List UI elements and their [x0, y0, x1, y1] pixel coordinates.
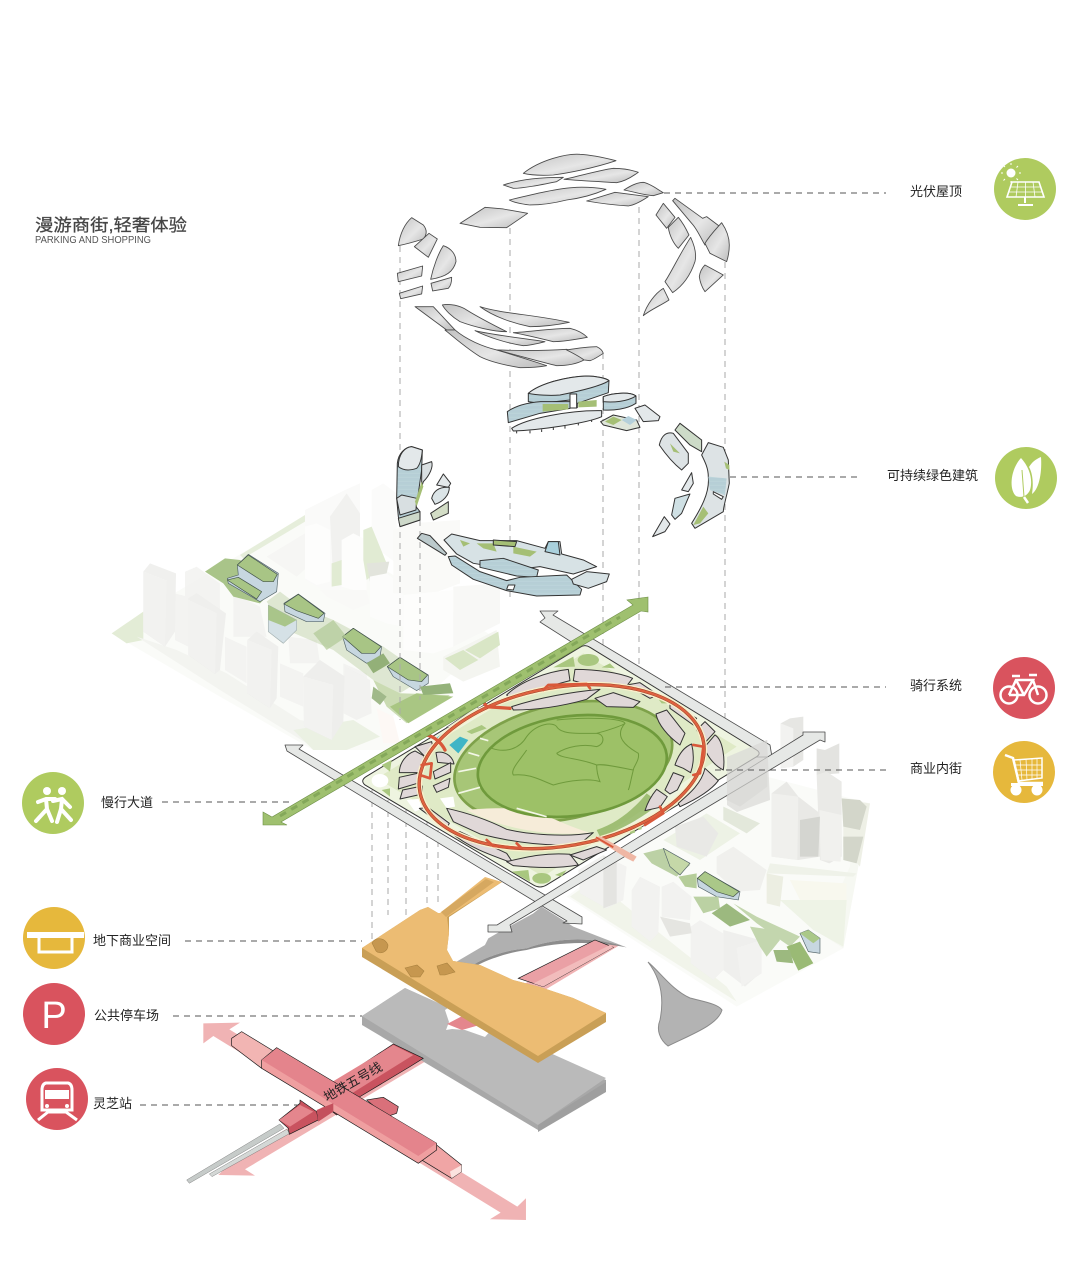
green terraces right — [643, 848, 820, 971]
front office towers — [143, 563, 400, 743]
front striped towers right — [578, 855, 762, 987]
south-west tube — [279, 1100, 318, 1134]
leader lines — [140, 193, 886, 1105]
bottom cluster — [415, 304, 603, 368]
label: parking: 公共停车场 — [94, 1008, 159, 1023]
back towers right — [675, 717, 867, 892]
pink metro tube back — [518, 940, 613, 987]
central park inner ellipse — [472, 705, 673, 827]
stub left — [232, 1032, 280, 1068]
park contours — [492, 718, 639, 790]
platform — [363, 646, 759, 887]
parking level — [362, 988, 606, 1132]
icon: leaves — [995, 447, 1057, 509]
white patches — [372, 774, 455, 812]
green terrace roofs — [205, 554, 453, 723]
road strips — [285, 611, 825, 932]
commercial blocks — [398, 669, 724, 867]
central park outer ellipse — [443, 683, 683, 841]
south-east road arrow — [488, 732, 825, 932]
skylight openings — [372, 939, 455, 977]
lawn patches — [382, 654, 670, 884]
title: PARKING AND SHOPPING — [35, 235, 151, 246]
green slow-walk avenue arrow — [263, 597, 648, 825]
icon: underground space — [23, 907, 85, 969]
park lower ribs — [597, 793, 660, 837]
void in parking level — [445, 1000, 500, 1037]
lower left podium — [417, 533, 609, 596]
metro stub through void — [447, 1012, 490, 1030]
icon: parking: P — [41, 995, 67, 1037]
title: 漫游商街,轻奢体验 — [35, 216, 187, 235]
strip by road — [447, 707, 482, 729]
stub right — [422, 1145, 462, 1178]
beige crescent — [467, 808, 590, 834]
grey lower blob — [648, 962, 722, 1046]
north-east tube — [313, 1044, 423, 1115]
underground commercial level — [362, 877, 606, 1063]
right cluster — [643, 198, 729, 316]
left tower — [397, 447, 451, 527]
right city block — [567, 717, 870, 1007]
metro arrows — [203, 940, 620, 1220]
top cluster — [460, 154, 663, 228]
left cluster — [397, 218, 456, 299]
icon: walkers — [22, 772, 84, 834]
pond — [437, 733, 468, 753]
label: cycling: 骑行系统 — [910, 678, 962, 693]
red spur — [595, 836, 637, 862]
ghost striped towers — [175, 567, 372, 713]
icon: parking — [23, 983, 85, 1045]
label: slow walk: 慢行大道 — [101, 795, 153, 810]
left city block — [112, 483, 500, 750]
south-west road arrow — [285, 745, 582, 924]
label: photovoltaic roof: 光伏屋顶 — [910, 184, 962, 199]
icon: bicycle — [993, 657, 1055, 719]
right bump — [367, 1097, 398, 1117]
solar roof panels — [397, 154, 729, 368]
metro line name: 地铁五号线 — [321, 1059, 385, 1105]
icon: shopping cart — [993, 741, 1055, 803]
label: inner street: 商业内街 — [910, 761, 962, 776]
label: green building: 可持续绿色建筑 — [887, 468, 978, 483]
dashed projection lines — [372, 207, 725, 960]
icon: solar panel — [994, 158, 1056, 220]
north-east road arrow — [540, 611, 772, 757]
park paths — [458, 738, 547, 817]
translucent corner building over platform — [727, 740, 770, 812]
icon: train — [26, 1068, 88, 1130]
label: station: 灵芝站 — [93, 1096, 132, 1111]
top podium building — [507, 376, 660, 433]
back residential towers — [305, 483, 500, 682]
rails — [187, 1124, 290, 1183]
title — [35, 216, 187, 246]
metro station — [187, 1032, 462, 1183]
right arc buildings — [653, 423, 729, 537]
red cycling ring — [406, 664, 717, 870]
grey ground blob — [457, 907, 627, 967]
green buildings layer — [397, 376, 729, 596]
main hall — [262, 1048, 437, 1163]
label: underground commerce: 地下商业空间 — [93, 933, 171, 948]
